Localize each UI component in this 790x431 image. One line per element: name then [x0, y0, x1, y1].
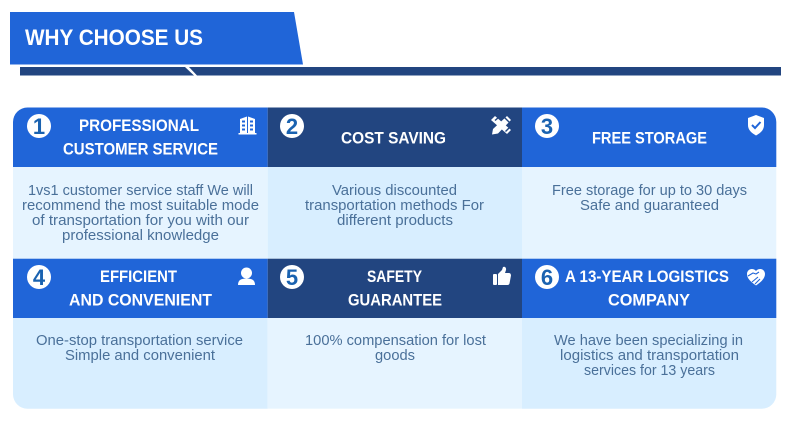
heading: GUARANTEE — [348, 292, 442, 310]
body text — [305, 333, 486, 364]
icon: heart handshake — [747, 269, 765, 286]
panel: safety guarantee — [268, 259, 522, 409]
number badge 5 — [280, 265, 304, 290]
panel: free storage — [522, 108, 776, 258]
icon: building — [238, 116, 256, 134]
body text: logistics and transportation — [560, 348, 739, 364]
body text: different products — [337, 213, 453, 229]
heading: CUSTOMER SERVICE — [63, 140, 218, 158]
body text: services for 13 years — [584, 363, 715, 379]
heading — [565, 268, 729, 310]
heading: SAFETY — [367, 268, 422, 286]
banner underline bar — [20, 67, 781, 76]
body text: 100% compensation for lost — [305, 333, 486, 349]
icon: pencil and ruler — [491, 116, 511, 134]
body text: Safe and guaranteed — [580, 198, 719, 214]
icon: thumbs up — [493, 267, 511, 285]
body text: We have been specializing in — [554, 333, 743, 349]
panel: efficient and convenient — [13, 259, 268, 409]
body text — [36, 333, 243, 364]
heading: COST SAVING — [341, 130, 446, 148]
body text — [305, 183, 484, 229]
heading: FREE STORAGE — [592, 130, 707, 148]
body text: Free storage for up to 30 days — [552, 183, 747, 199]
number badge 2: 2 — [286, 114, 298, 139]
heading: EFFICIENT — [100, 268, 177, 286]
title banner — [10, 12, 303, 64]
number badge 4: 4 — [33, 265, 46, 290]
number badge 6 — [535, 265, 559, 290]
number badge 4 — [27, 265, 51, 290]
body text — [554, 333, 743, 379]
body text: goods — [375, 348, 415, 364]
heading — [69, 268, 212, 310]
body text: transportation methods For — [305, 198, 484, 214]
body text: of transportation for you with our — [32, 213, 249, 229]
heading — [348, 268, 442, 310]
heading: COMPANY — [608, 292, 690, 310]
icon: person — [238, 268, 255, 285]
panel: cost saving — [268, 108, 522, 258]
panel: 13-year logistics company — [522, 259, 776, 409]
icon: shield check — [748, 115, 764, 136]
body text: recommend the most suitable mode — [22, 198, 259, 214]
number badge 3: 3 — [541, 114, 553, 139]
number badge 5: 5 — [286, 265, 298, 290]
number badge 1: 1 — [33, 114, 45, 139]
heading: PROFESSIONAL — [79, 117, 199, 135]
body text: 1vs1 customer service staff We will — [28, 183, 253, 199]
body text: professional knowledge — [62, 228, 219, 244]
body text: Various discounted — [332, 183, 457, 199]
number badge 6: 6 — [541, 265, 553, 290]
number badge 3 — [535, 114, 559, 139]
body text — [552, 183, 747, 214]
number badge 1 — [27, 114, 51, 139]
heading: why choose us: WHY CHOOSE US — [25, 25, 203, 50]
heading: AND CONVENIENT — [69, 292, 212, 310]
heading: A 13-YEAR LOGISTICS — [565, 268, 729, 286]
panel: professional customer service — [13, 108, 268, 258]
body text — [22, 183, 259, 244]
number badge 2 — [280, 114, 304, 139]
body text: Simple and convenient — [65, 348, 215, 364]
body text: One-stop transportation service — [36, 333, 243, 349]
heading — [63, 117, 218, 158]
